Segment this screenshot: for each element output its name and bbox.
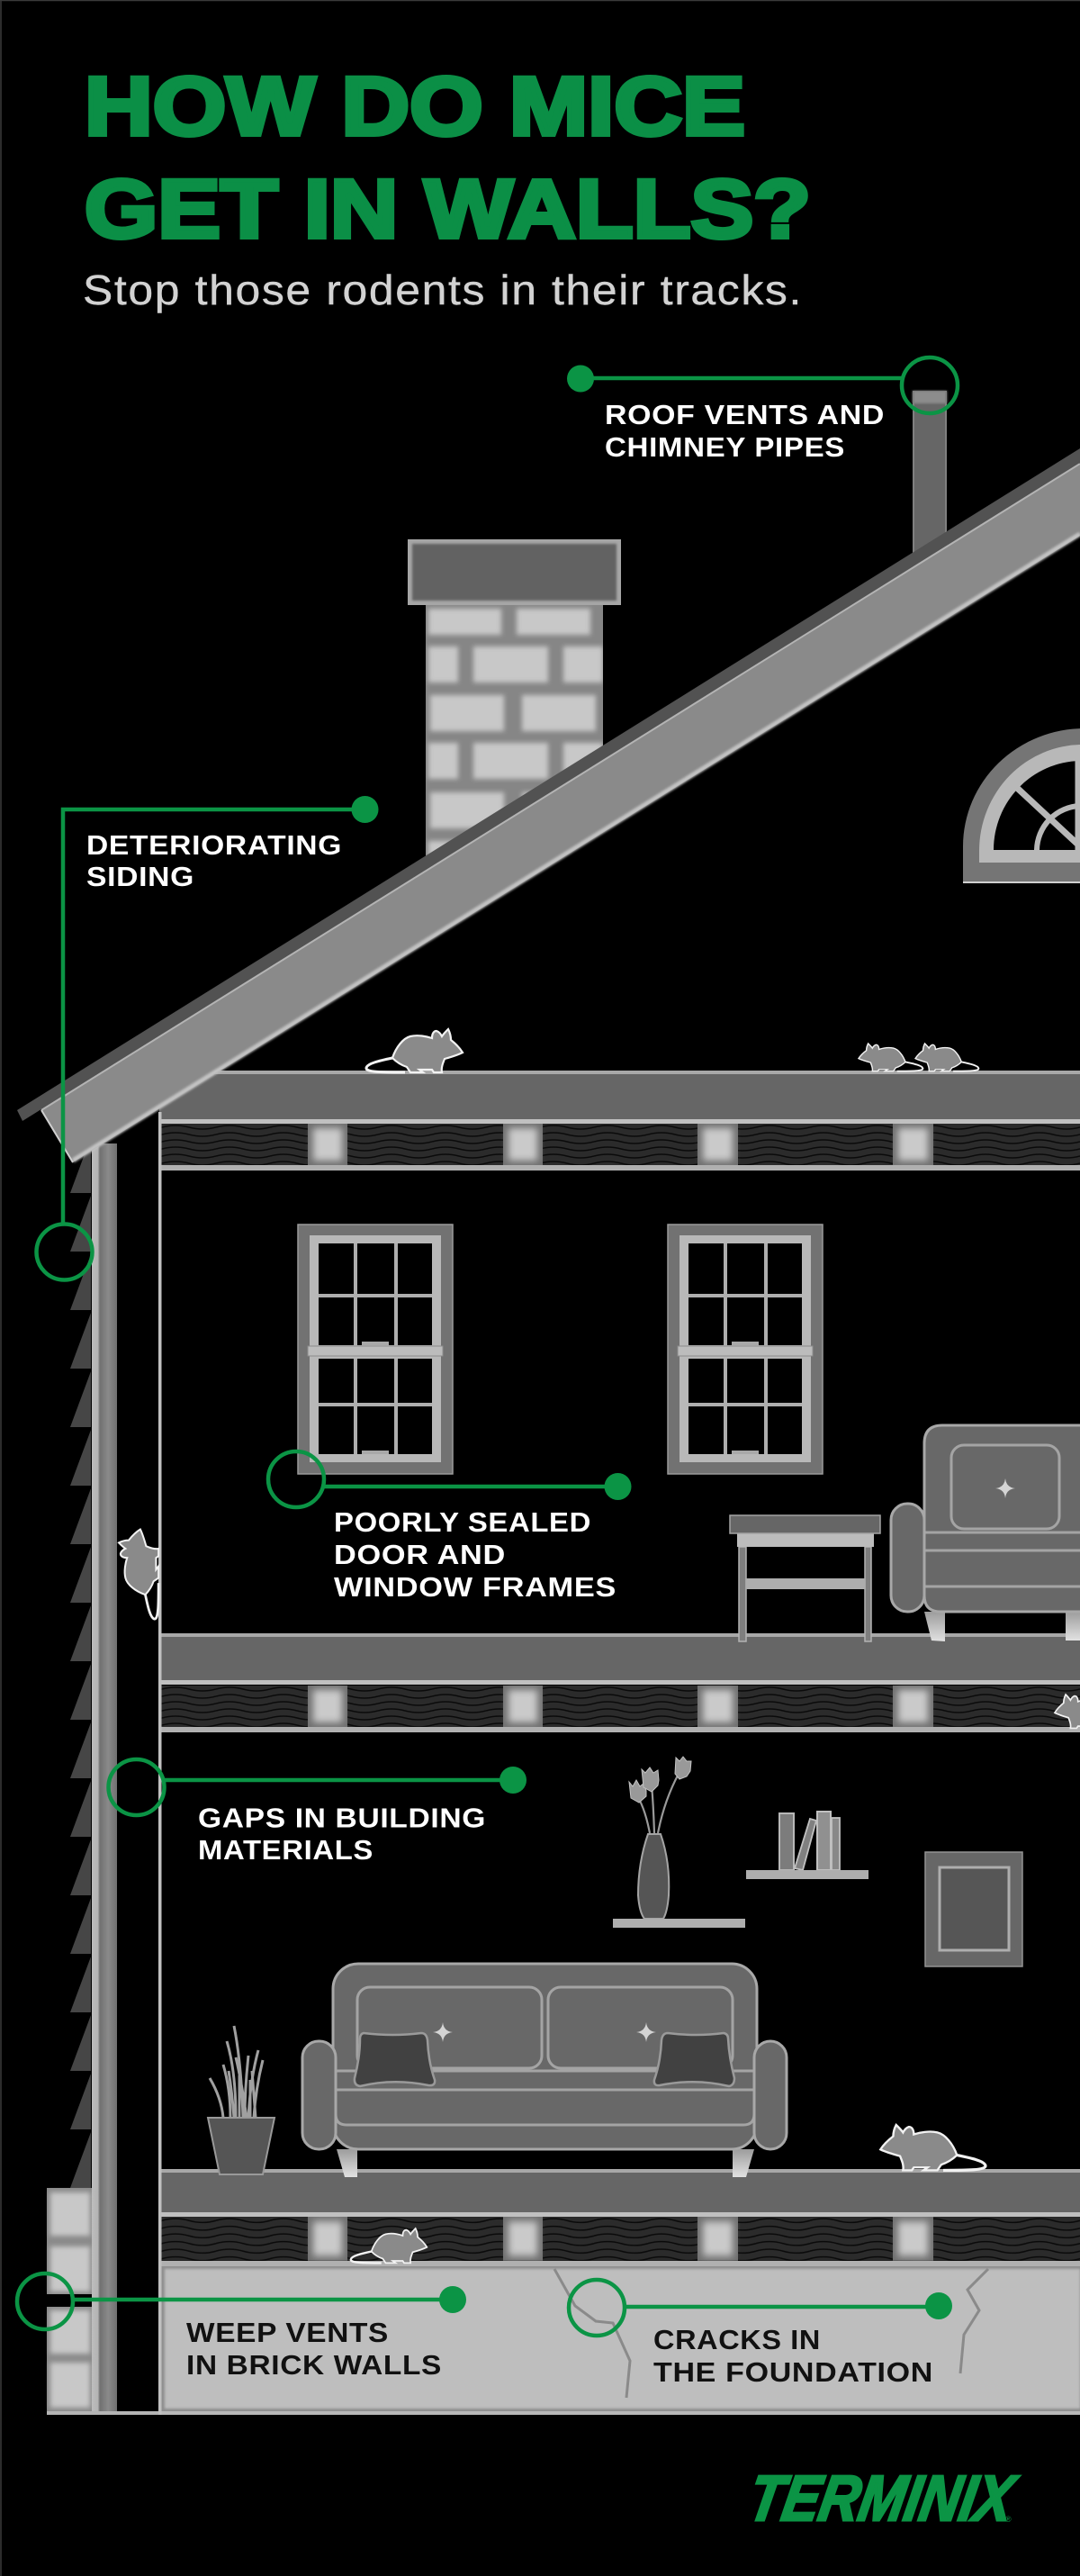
mouse: in ground floor insulation [351,2228,427,2263]
logo: Terminix: TERMINIX [743,2463,1022,2535]
foundation cracks [554,2269,988,2398]
roof vent pipe [913,391,947,562]
mouse: climbing inside wall [119,1530,158,1619]
interior wall line [158,1112,162,2415]
callout: roof vents and chimney pipes [567,357,958,463]
sofa [302,1964,787,2177]
mouse: on ground floor [880,2125,986,2170]
callout: deteriorating siding: DETERIORATING [86,829,342,861]
window: left [298,1225,453,1474]
callout: gaps in building materials [108,1759,526,1866]
ground floor insulation and studs [159,2217,1080,2266]
armchair [891,1425,1080,1641]
callout: weep vents in brick walls [17,2273,466,2381]
callout: cracks in the foundation: CRACKS IN [653,2324,821,2355]
callout: cracks in the foundation: THE FOUNDATION [653,2356,933,2388]
callout: poorly sealed door and window frames: WINDOW FRAMES [334,1571,616,1603]
siding clapboards [70,1137,91,2188]
ground floor band [159,2169,1080,2217]
callout: roof vents and chimney pipes: CHIMNEY PIPES [605,431,845,463]
attic insulation and studs [159,1124,1080,1170]
title: GET IN WALLS? [85,164,811,256]
vase with tulips on shelf [613,1757,745,1928]
mouse: in upper floor insulation [1055,1695,1080,1728]
callout: deteriorating siding [36,796,378,1280]
left exterior wall [92,1143,117,2413]
callout: weep vents in brick walls: IN BRICK WALLS [186,2349,442,2381]
callout: poorly sealed door and window frames: DOOR AND [334,1539,506,1570]
callout: gaps in building materials: MATERIALS [198,1834,374,1866]
logo: Terminix: ® [1005,2515,1012,2524]
mouse: small on attic floor, left [859,1044,922,1071]
mouse: small on attic floor, right [915,1044,978,1071]
callout: gaps in building materials: GAPS IN BUILDING [198,1803,486,1833]
callout: roof vents and chimney pipes: ROOF VENTS AND [605,399,885,430]
semicircular attic window [963,728,1080,882]
roof [17,448,1080,1162]
callout: weep vents in brick walls: WEEP VENTS [186,2317,389,2348]
potted plant [208,2026,274,2174]
subtitle: Stop those rodents in their tracks. [83,267,803,313]
upper floor band [159,1633,1080,1685]
title: HOW DO MICE [85,61,745,153]
chimney [408,539,621,877]
title [85,61,811,256]
callout: poorly sealed door and window frames [268,1451,632,1603]
window: right [668,1225,823,1474]
side table [730,1515,880,1641]
exterior bricks with weep vent [47,2188,159,2415]
wall picture [925,1852,1022,1966]
foundation [159,2266,1080,2415]
attic floor band [159,1071,1080,1124]
callout: deteriorating siding: SIDING [86,861,194,892]
callout: cracks in the foundation [569,2280,952,2388]
mouse: large on attic floor [366,1029,463,1072]
books on shelf [746,1812,868,1879]
upper floor insulation and studs [159,1686,1080,1732]
callout: poorly sealed door and window frames: POORLY SEALED [334,1506,591,1538]
